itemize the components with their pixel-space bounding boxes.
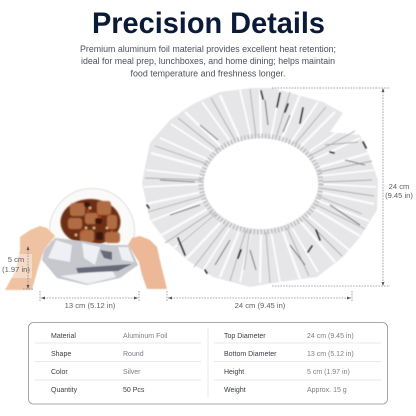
height label overlay: (1.97 in) — [2, 265, 30, 274]
top diameter horizontal dimension: 24 cm (9.45 in) — [235, 301, 286, 310]
right specs column: 13 cm (5.12 in) — [307, 351, 354, 358]
title: Precision Details — [92, 7, 325, 40]
foil cover product — [142, 88, 378, 287]
left specs column: 50 Pcs — [123, 387, 145, 394]
right specs column: Height — [224, 369, 244, 376]
left specs column: Aluminum Foil — [123, 333, 168, 340]
left specs column — [51, 333, 168, 394]
gathered elastic rim — [201, 136, 321, 232]
foil height vertical dimension: 24 cm — [389, 182, 409, 191]
left specs column: Round — [123, 351, 144, 358]
left specs column: Material — [51, 333, 76, 340]
bottom diameter dimension: 13 cm (5.12 in) — [65, 301, 116, 310]
description text: Premium aluminum foil material provides excellent heat retention; — [80, 44, 336, 54]
right specs column: 5 cm (1.97 in) — [307, 369, 350, 376]
foil height vertical dimension — [272, 88, 413, 286]
height dimension arrow — [23, 246, 33, 289]
right specs column — [224, 333, 354, 394]
height label overlay: 5 cm — [8, 255, 24, 264]
description text: ideal for meal prep, lunchboxes, and home dining; helps maintain — [81, 56, 335, 66]
right specs column: Approx. 15 g — [307, 387, 347, 394]
right specs column: Bottom Diameter — [224, 351, 277, 358]
right hand — [128, 236, 167, 289]
right specs column: Top Diameter — [224, 333, 266, 340]
left hand — [5, 226, 55, 290]
foil bowl cover in hands — [42, 238, 138, 285]
right specs column: 24 cm (9.45 in) — [307, 333, 354, 340]
specification table — [28, 322, 388, 404]
right specs column: Weight — [224, 387, 246, 394]
description text — [80, 44, 336, 78]
bottom diameter dimension — [40, 291, 139, 310]
foil height vertical dimension: (9.45 in) — [385, 191, 413, 200]
bowl with food — [48, 188, 136, 274]
left specs column: Color — [51, 369, 68, 376]
top diameter horizontal dimension — [167, 291, 352, 310]
left specs column: Silver — [123, 369, 141, 376]
height label overlay — [2, 254, 32, 278]
left specs column: Shape — [51, 351, 71, 358]
left specs column: Quantity — [51, 387, 78, 394]
description text: food temperature and freshness longer. — [130, 68, 286, 78]
